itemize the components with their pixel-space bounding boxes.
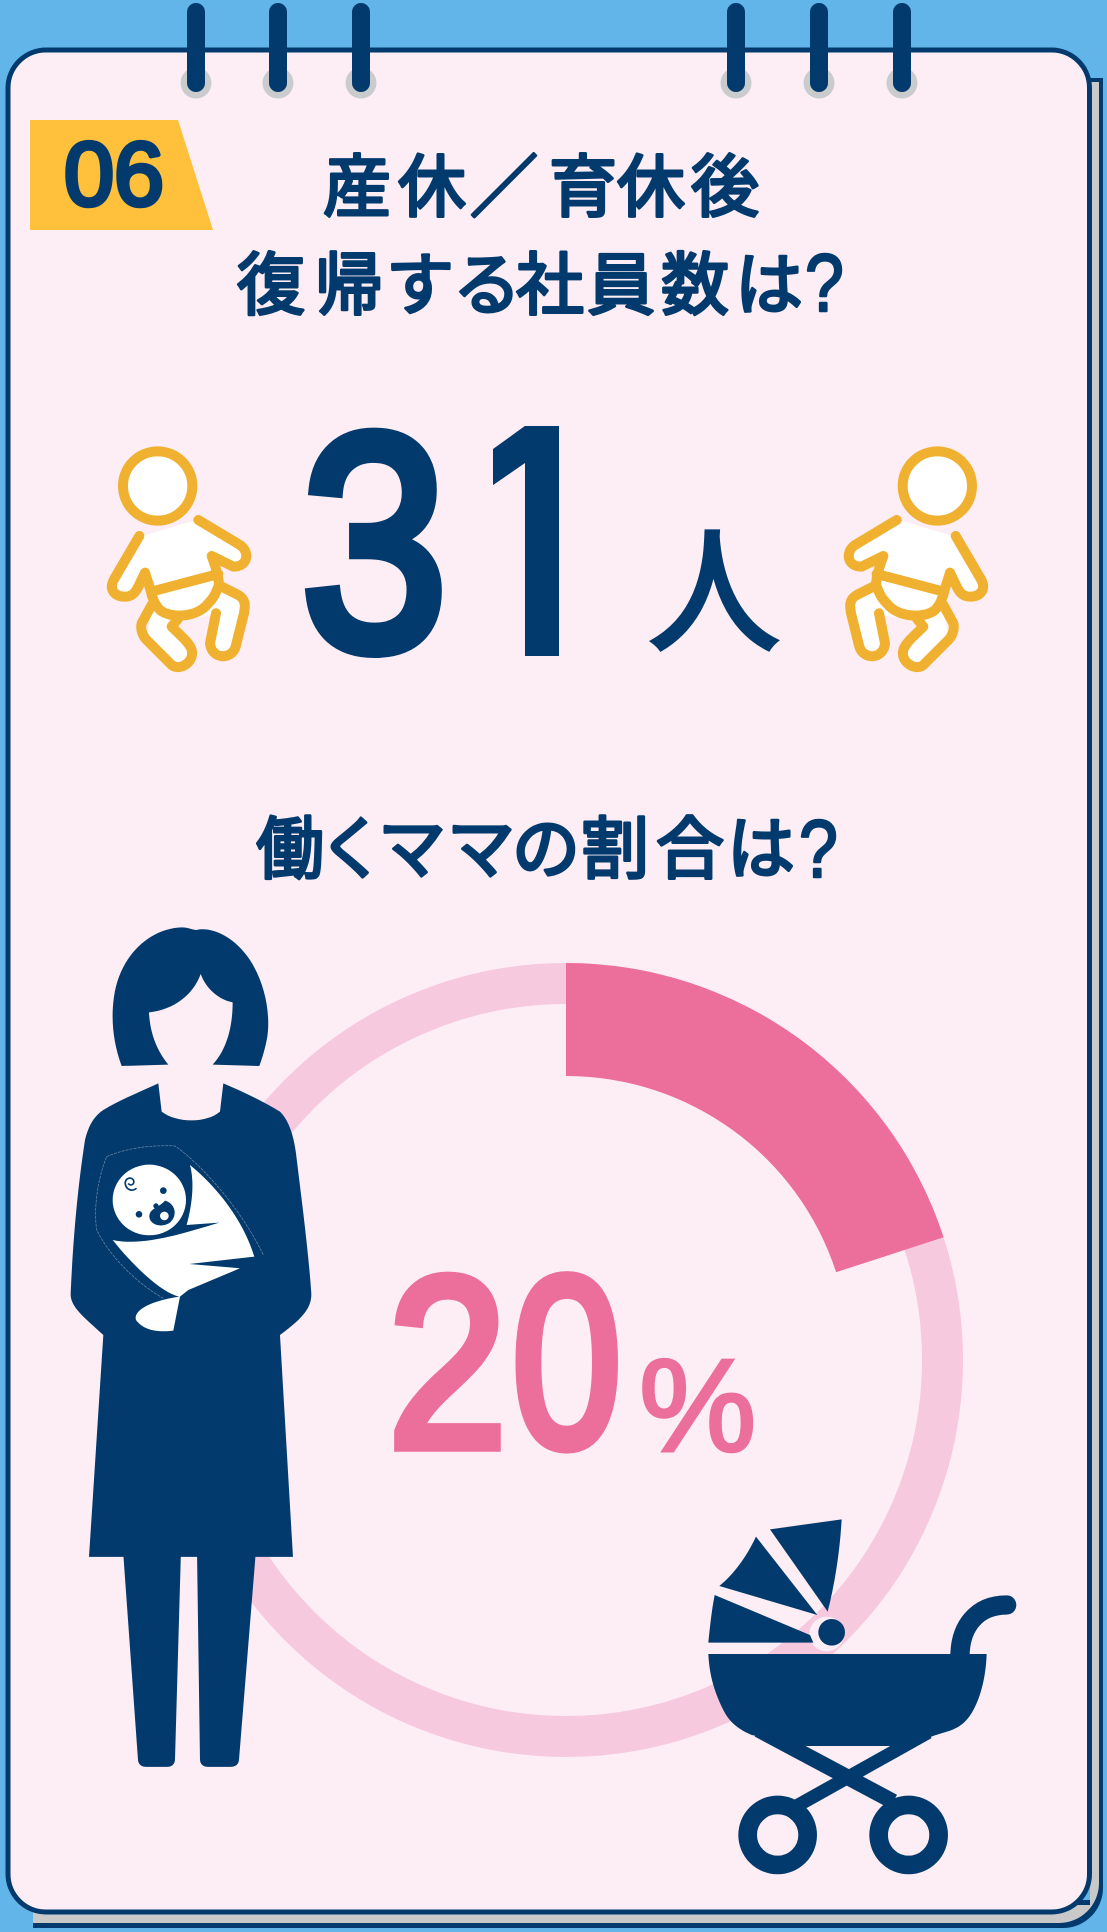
icon: baby left — [112, 451, 247, 668]
title: 産休／育休後 — [323, 150, 759, 226]
percentage value: 2 — [388, 1227, 507, 1499]
percentage value — [388, 1226, 756, 1499]
baby outline — [96, 1146, 263, 1298]
baby blanket — [113, 1165, 254, 1331]
mother legs — [123, 1550, 256, 1767]
baby face — [113, 1165, 186, 1235]
icon: stroller — [708, 1519, 1007, 1865]
number tag: 06 — [64, 125, 164, 225]
percentage value: % — [639, 1332, 756, 1479]
big number: 1 — [470, 347, 617, 716]
heading: working mothers: ? — [799, 804, 838, 895]
spiral binding rings — [180, 12, 918, 98]
number tag — [30, 120, 213, 230]
donut chart 20% — [190, 963, 944, 1736]
mother hair — [113, 927, 268, 1066]
title: 復帰する社員数は — [237, 248, 803, 324]
heading: working mothers: 働くママの割合は — [256, 812, 795, 888]
percentage value: 0 — [512, 1226, 621, 1498]
mother dress — [71, 1083, 311, 1557]
big number: 3 — [301, 371, 448, 714]
title — [237, 150, 844, 329]
big number: 人 — [646, 518, 782, 670]
big number — [304, 426, 780, 658]
icon: baby right — [848, 451, 983, 668]
title: ? — [805, 238, 844, 329]
mother holding baby — [71, 927, 311, 1767]
